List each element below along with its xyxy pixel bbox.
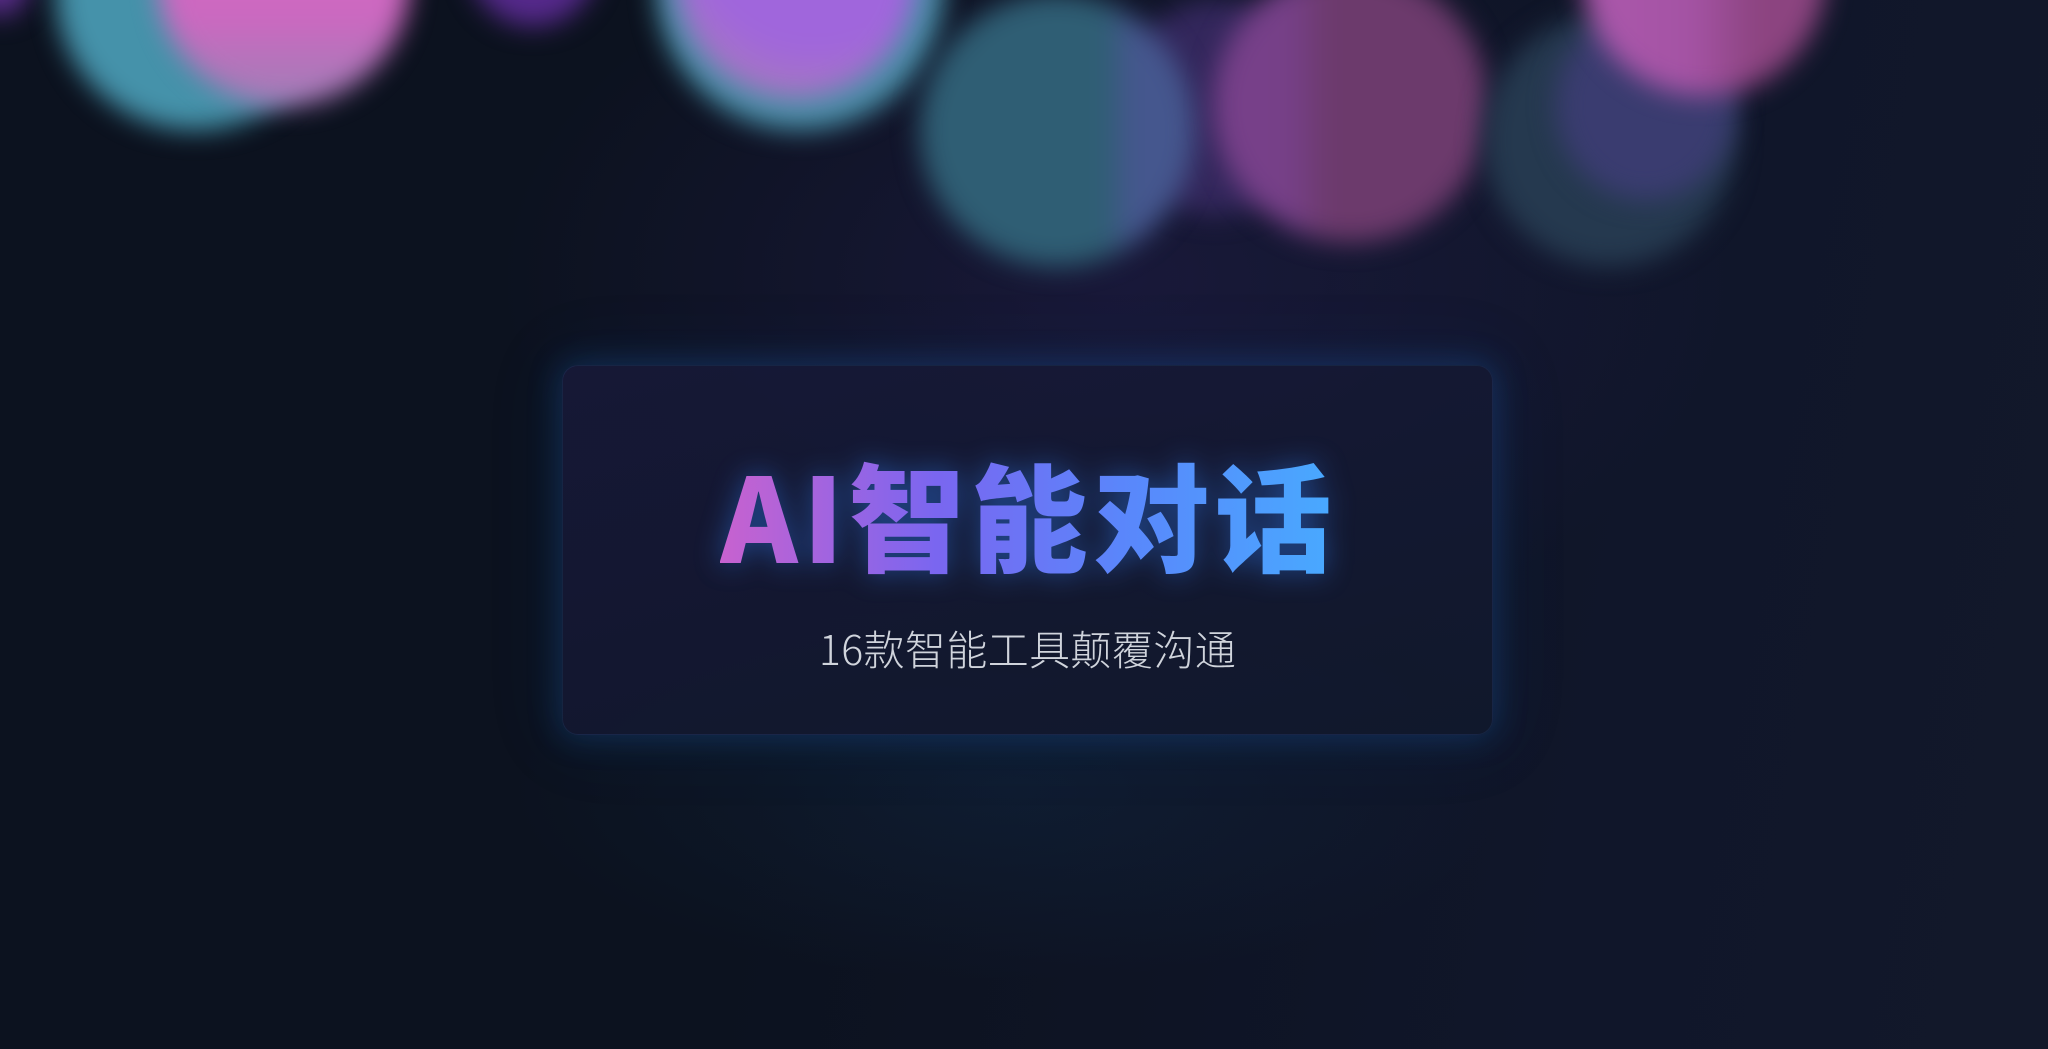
subtitle: 16款智能工具颠覆沟通 — [819, 617, 1236, 677]
title: AI智能对话 — [720, 427, 1337, 597]
panel: central title card — [562, 365, 1493, 735]
bokeh light circles — [0, 0, 1840, 280]
